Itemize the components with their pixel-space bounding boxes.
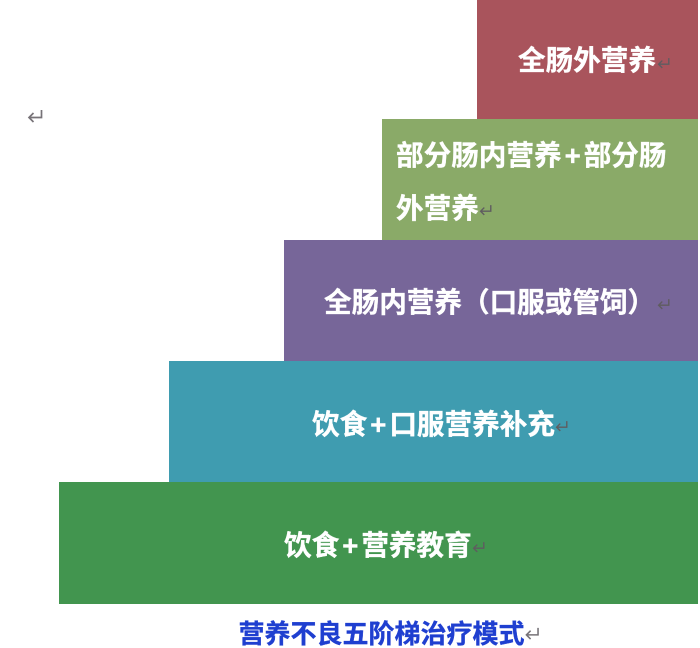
- step 4 label line 2: 外营养: [396, 193, 479, 224]
- step 5 label: 全肠外营养: [518, 45, 656, 76]
- step 2: diet plus oral nutritional supplements: [169, 361, 698, 482]
- step 3: total enteral nutrition: [284, 240, 698, 361]
- icon: return mark: [480, 205, 492, 216]
- step 5: total parenteral nutrition: [477, 0, 698, 119]
- icon: return mark: [658, 58, 670, 68]
- icon: return mark: [472, 542, 484, 552]
- step 2 label: 饮食+口服营养补充: [312, 409, 555, 440]
- icon: return mark: [658, 299, 670, 310]
- icon: stray return mark: [28, 110, 42, 123]
- step 4: partial enteral plus partial parenteral nutrition: [382, 119, 698, 240]
- step 1 label: 饮食+营养教育: [284, 530, 472, 561]
- step 3 label: 全肠内营养（口服或管饲）: [324, 287, 655, 318]
- step 4 label line 1: 部分肠内营养+部分肠: [396, 140, 666, 171]
- icon: caption return mark: [525, 628, 539, 640]
- icon: return mark: [556, 421, 568, 432]
- step 1: diet plus nutrition education: [59, 482, 698, 604]
